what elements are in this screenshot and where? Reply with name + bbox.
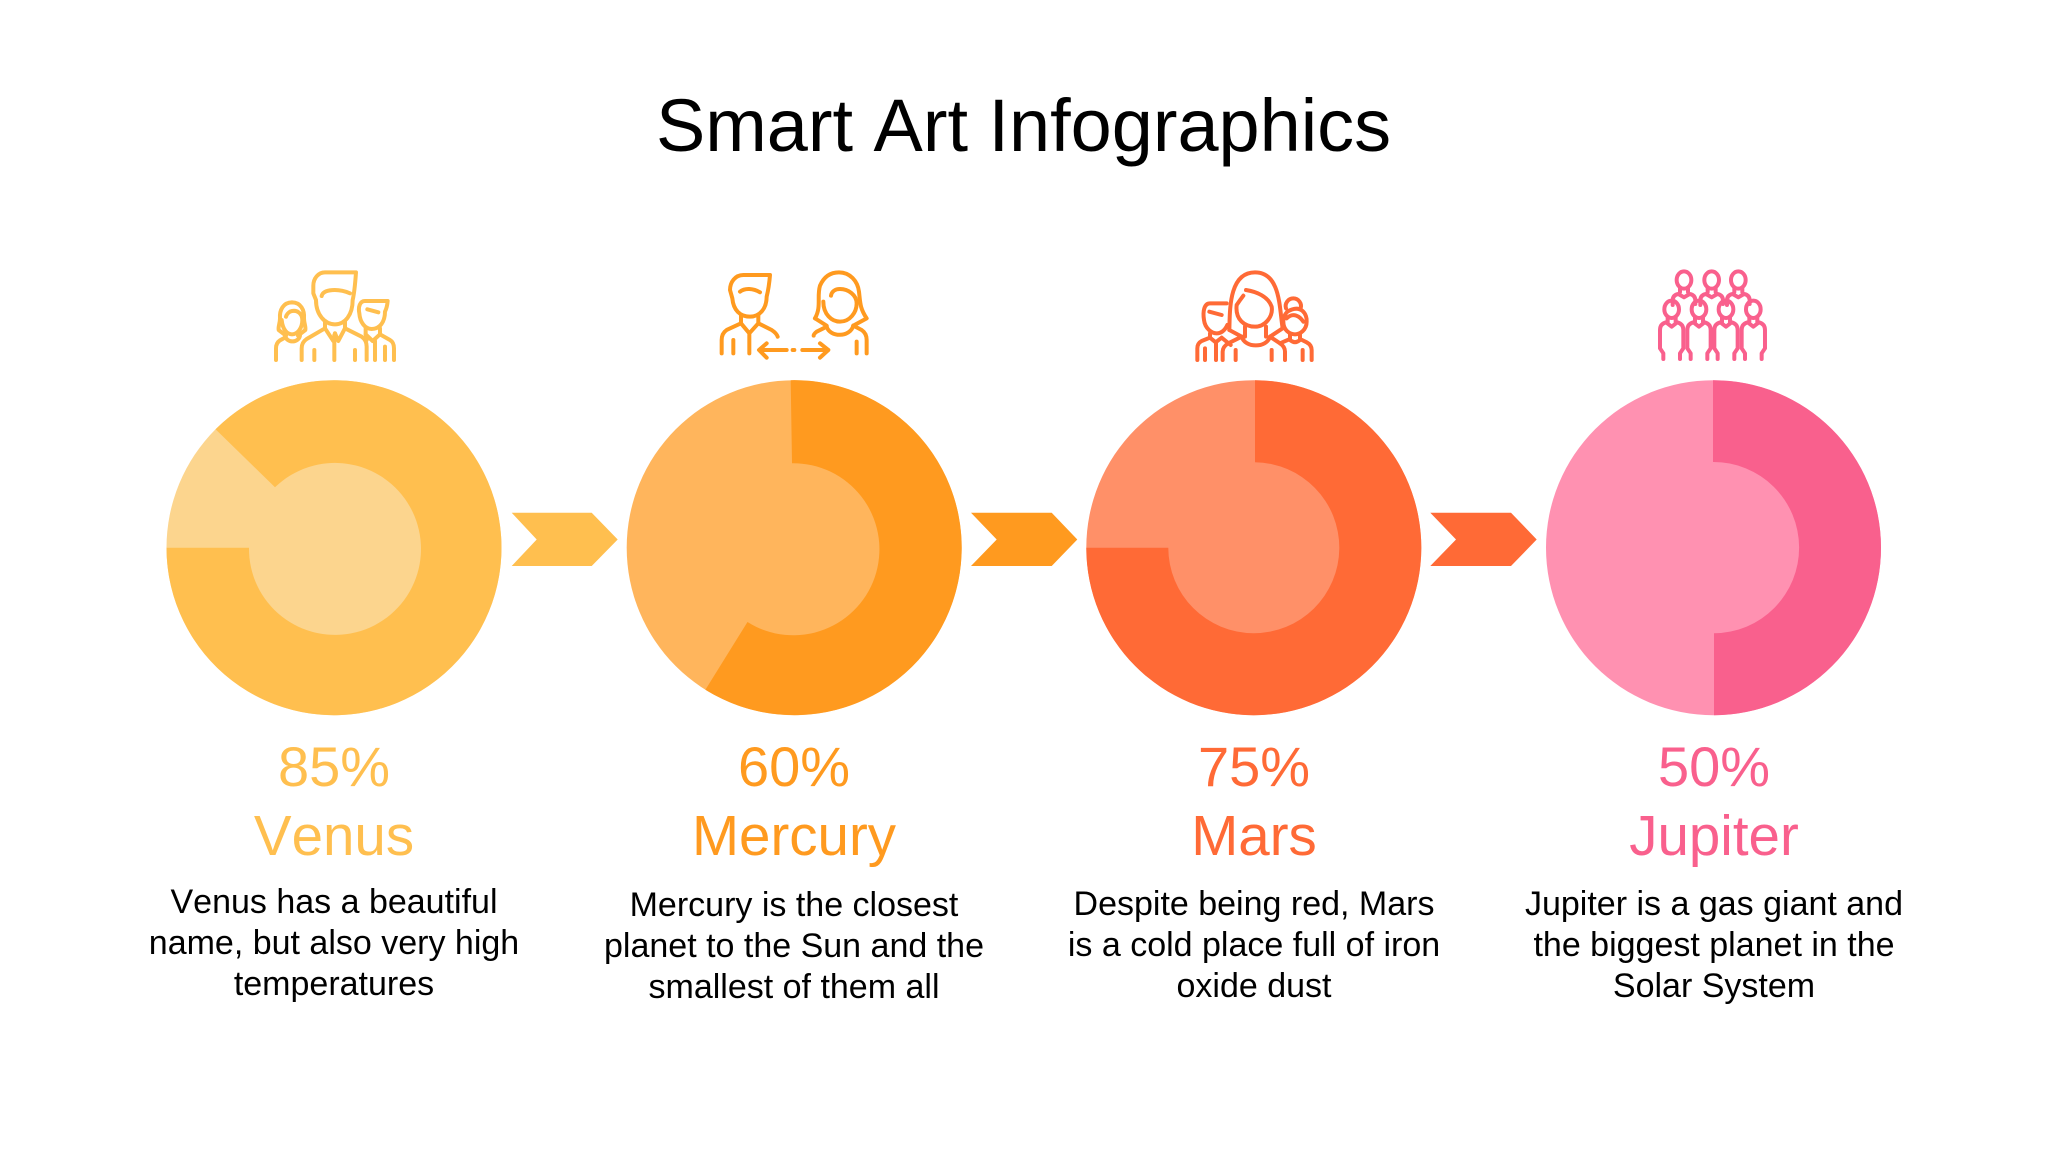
column: Jupiter — [1525, 271, 1903, 1005]
column: Venus — [149, 272, 519, 1003]
description: Solar System — [1613, 967, 1815, 1005]
description: temperatures — [234, 965, 434, 1003]
icon: two people exchanging — [722, 272, 867, 358]
arrow: Mars to Jupiter — [1430, 513, 1537, 566]
column: Mercury — [604, 272, 984, 1006]
description: is a cold place full of iron — [1068, 926, 1440, 964]
donut chart: 60% — [627, 380, 962, 715]
donut chart: 85% — [166, 380, 502, 715]
percentage: 50% — [1658, 735, 1770, 798]
arrow: Venus to Mercury — [512, 513, 618, 566]
description: smallest of them all — [648, 968, 940, 1006]
column: Mars — [1068, 272, 1440, 1005]
description: Venus has a beautiful — [170, 883, 498, 921]
planet name: Mars — [1191, 804, 1317, 867]
percentage: 75% — [1198, 735, 1310, 798]
description: the biggest planet in the — [1533, 926, 1895, 964]
icon: family group — [276, 272, 394, 360]
icon: crowd of people — [1660, 271, 1765, 359]
title: Smart Art Infographics — [656, 84, 1391, 167]
description: planet to the Sun and the — [604, 927, 984, 965]
planet name: Mercury — [692, 804, 897, 867]
planet name: Jupiter — [1629, 804, 1799, 867]
description: oxide dust — [1176, 967, 1332, 1005]
percentage: 85% — [278, 735, 390, 798]
percentage: 60% — [738, 735, 850, 798]
arrow: Mercury to Mars — [971, 513, 1077, 566]
description: Mercury is the closest — [630, 886, 959, 924]
description: name, but also very high — [149, 924, 519, 962]
donut chart: 75% — [1086, 380, 1421, 715]
donut chart: 50% — [1546, 380, 1881, 715]
icon: woman with family — [1197, 272, 1312, 360]
planet name: Venus — [254, 804, 414, 867]
description: Jupiter is a gas giant and — [1525, 885, 1903, 923]
description: Despite being red, Mars — [1074, 885, 1434, 923]
